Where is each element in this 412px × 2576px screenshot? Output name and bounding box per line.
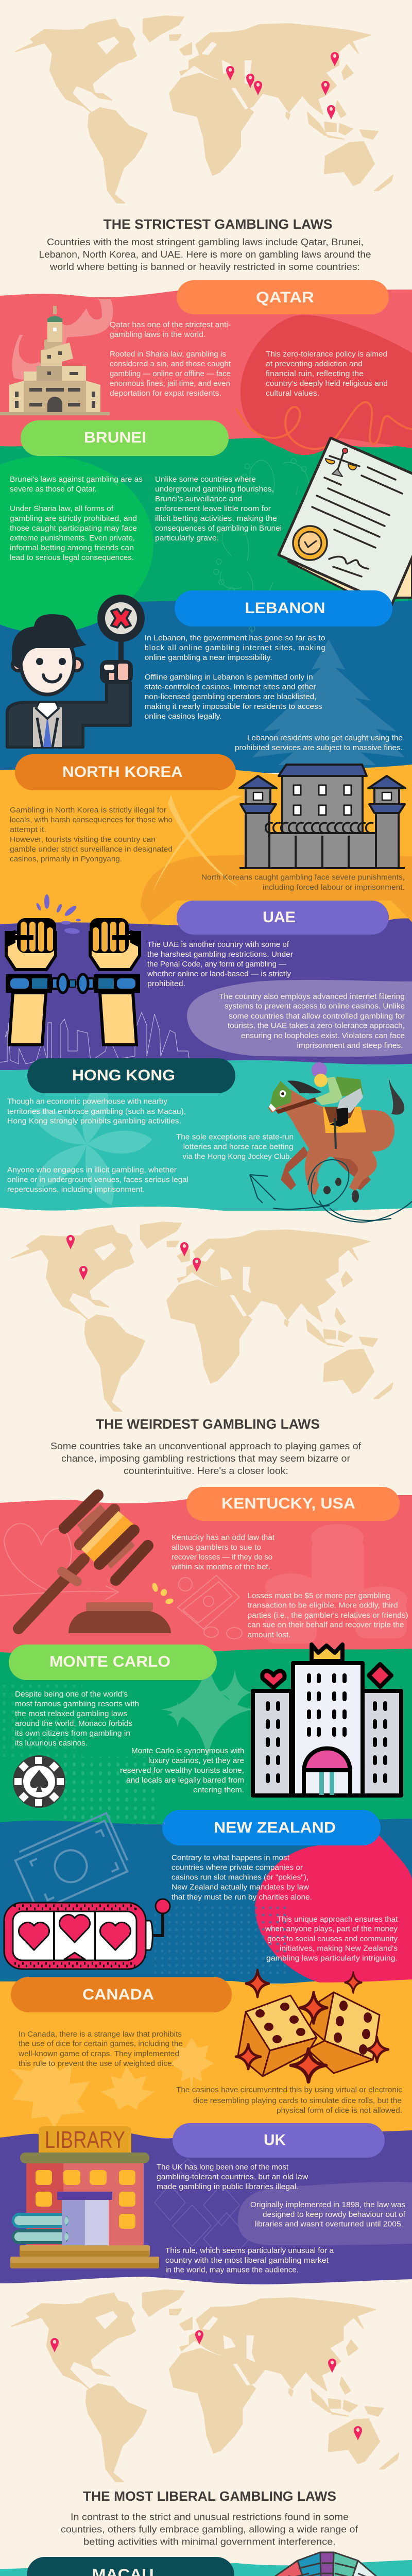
text: UAE right: ensuring no loopholes exist. Violators can face — [241, 1032, 405, 1040]
text: Brunei right — [155, 476, 282, 543]
text: Qatar right: This zero-tolerance policy is aimed — [266, 350, 387, 359]
text: Qatar right — [266, 350, 388, 398]
intro text: weirdest: counterintuitive. Here's a closer look: — [124, 1466, 288, 1476]
blob and faint X backdrop — [141, 794, 412, 922]
text: Qatar left: considered a sin, and those caught — [110, 360, 231, 368]
text: Hong Kong penalties: Anyone who engages in illicit gambling, whether — [7, 1166, 177, 1175]
text: Lebanon main: making it nearly impossible for residents to access — [145, 703, 322, 711]
text: Qatar right: at preventing addiction and — [266, 360, 363, 368]
text: UK middle: libraries and wasn't overturned until 2005. — [254, 2221, 403, 2229]
text: Qatar left: Qatar has one of the strictest anti- — [110, 321, 231, 329]
text: Lebanon main: state-controlled casinos. Internet sites and other — [145, 683, 316, 691]
pill: Kentucky: KENTUCKY, USA — [221, 1495, 355, 1512]
text: Lebanon main — [145, 634, 325, 721]
text: Canada right: The casinos have circumvented this by using virtual or electronic — [176, 2086, 402, 2094]
text: Kentucky bottom: Losses must be $5 or more per gambling — [248, 1592, 390, 1600]
text: UAE right: systems to prevent access to online casinos. Unlike — [225, 1003, 405, 1011]
intro text: strictest — [39, 237, 371, 272]
icon: casino hotel — [253, 1645, 401, 1795]
cedar tree backdrop — [252, 639, 405, 765]
intro text: strictest: Lebanon, North Korea, and UAE. Here is more on gambling laws around the — [39, 249, 371, 260]
icon: library building — [10, 2126, 159, 2268]
pill: Hong Kong: HONG KONG — [72, 1067, 175, 1084]
text: Hong Kong top: Though an economic powerhouse with nearby — [7, 1097, 168, 1106]
text: Qatar left — [110, 321, 231, 398]
bauhinia flower backdrop — [25, 1080, 154, 1209]
text: Lebanon main: online gambling a near impossibility. — [145, 654, 272, 662]
text: Canada right: physical form of dice is not allowed. — [277, 2107, 402, 2115]
text: Qatar left: deportation for expat residents. — [110, 389, 221, 398]
panel: Hong Kong — [7, 1058, 412, 1222]
text: New Zealand bottom — [265, 1916, 398, 1963]
text: UAE right: some countries that allow controlled gambling for — [229, 1012, 405, 1021]
text: Monte Carlo right: entering them. — [193, 1786, 244, 1794]
text: Qatar left: enormous fines, jail time, and even — [110, 380, 230, 388]
pill: UK — [173, 2123, 385, 2158]
text: Brunei left: informal betting among friends can — [10, 544, 134, 552]
panel: UK — [10, 2123, 412, 2275]
text: Lebanon main: online casinos legally. — [145, 713, 222, 721]
faint diamond pattern — [154, 2159, 250, 2264]
text: UAE right: The country also employs advanced internet filtering — [219, 993, 405, 1001]
icon: dice — [236, 1970, 388, 2082]
text: Canada right — [176, 2086, 402, 2115]
text: Hong Kong exceptions: The sole exceptions are state-run — [176, 1133, 294, 1142]
heading: weirdest gambling laws: THE WEIRDEST GAMBLING LAWS — [96, 1416, 320, 1432]
text: Monte Carlo left: Despite being one of the world's — [15, 1690, 128, 1699]
text: North Korea right: including forced labour or imprisonment. — [263, 884, 405, 892]
text: Brunei left: Under Sharia law, all forms of — [10, 505, 114, 513]
text: North Korea left — [10, 806, 173, 863]
text: North Korea left: Gambling in North Korea is strictly illegal for — [10, 806, 166, 815]
panel: Qatar — [0, 280, 412, 455]
pill: Hong Kong — [27, 1058, 235, 1093]
text: New Zealand top: New Zealand actually mandates by law — [171, 1884, 310, 1892]
text: Kentucky top: Kentucky has an odd law that — [171, 1534, 274, 1542]
pill: New Zealand — [162, 1810, 381, 1845]
text: Brunei right: Brunei's surveillance and — [155, 495, 242, 503]
world map: weirdest laws — [11, 1222, 393, 1411]
text: Qatar right: financial ruin, reflecting the — [266, 370, 364, 378]
text: UAE right — [219, 993, 405, 1050]
text: Brunei left: those caught participating may face — [10, 524, 137, 533]
text: Kentucky top: within six months of the bet. — [171, 1563, 270, 1571]
pill: UAE — [177, 901, 389, 935]
text: Monte Carlo left: most famous gambling resorts with — [15, 1700, 139, 1708]
blob: dark red — [241, 315, 412, 455]
text: North Korea left: However, tourists visiting the country can — [10, 836, 156, 844]
intro text: liberal: countries, others fully embrace gambling, allowing a wide range of — [61, 2524, 358, 2535]
intro text: weirdest: chance, imposing gambling restrictions that may seem bizarre or — [61, 1453, 350, 1464]
icon: man holding prohibition sign — [7, 595, 145, 747]
text: Monte Carlo left: around the world, Monaco forbids — [15, 1720, 132, 1728]
text: Monte Carlo right: luxury casinos, yet they are — [148, 1757, 244, 1765]
text: UAE right: tourists, the UAE takes a zero-tolerance approach, — [228, 1022, 405, 1030]
text: Lebanon main: block all online gambling internet sites, making — [145, 644, 325, 652]
pill: Brunei: BRUNEI — [84, 429, 146, 446]
text: Brunei left: gambling are strictly prohibited, and — [10, 515, 137, 523]
panel: Monte Carlo — [0, 1645, 401, 1824]
text: New Zealand top — [171, 1854, 312, 1902]
text: Brunei left: Brunei's laws against gambling are as — [10, 476, 143, 484]
text: New Zealand bottom: goes to social causes and community — [267, 1935, 398, 1943]
text: Lebanon fines — [235, 734, 403, 752]
text: UK bottom: This rule, which seems particularly unusual for a — [165, 2247, 334, 2255]
text: Hong Kong exceptions: via the Hong Kong Jockey Club. — [183, 1153, 292, 1161]
panel: Lebanon — [7, 590, 405, 765]
text: Hong Kong exceptions — [176, 1133, 294, 1161]
text: North Korea right: North Koreans caught gambling face severe punishments, — [201, 874, 405, 882]
intro text: weirdest — [50, 1441, 362, 1476]
pill: North Korea — [15, 754, 236, 790]
intro text: liberal: In contrast to the strict and unusual restrictions found in some — [71, 2512, 349, 2522]
faint heart and money doodles — [0, 1523, 242, 1639]
text: Monte Carlo left: its luxurious casinos. — [15, 1739, 88, 1748]
text: Monte Carlo left: its own citizens from gambling in — [15, 1730, 130, 1738]
text: New Zealand top: Contrary to what happens in most — [171, 1854, 289, 1862]
text: UK bottom: in the world, may amuse the audience. — [165, 2266, 299, 2275]
text: Brunei right: Unlike some countries where — [155, 476, 256, 484]
text: Canada left: this rule to prevent the use of weighted dice. — [19, 2060, 174, 2068]
text: UK top: made gambling in public libraries illegal. — [157, 2183, 299, 2191]
halftone and sparkle backdrop — [0, 1658, 254, 1824]
icon: handcuffed fists — [5, 894, 141, 1045]
text: UK bottom — [165, 2247, 334, 2275]
text: Brunei right: particularly grave. — [155, 534, 219, 543]
text: Lebanon main: In Lebanon, the government has gone so far as to — [145, 634, 325, 642]
text: Kentucky top: recover losses — if they do so — [171, 1553, 272, 1562]
pill: Qatar — [177, 280, 389, 314]
panel: Kentucky — [0, 1487, 408, 1643]
text: UK middle: designed to keep rowdy behaviour out of — [263, 2211, 406, 2219]
pill: UAE: UAE — [263, 909, 296, 926]
text: North Korea left: casinos, primarily in Pyongyang. — [10, 855, 122, 863]
icon: prison — [239, 765, 405, 868]
text: UK top — [157, 2163, 308, 2191]
panel: Canada — [10, 1970, 402, 2128]
skyline outline — [0, 1012, 195, 1064]
pill: New Zealand: NEW ZEALAND — [214, 1819, 336, 1836]
text: Qatar left: Rooted in Sharia law, gambling is — [110, 350, 226, 359]
calligraphy backdrop — [12, 299, 113, 380]
text: Qatar right: cultural values. — [266, 389, 319, 398]
text: New Zealand top: that they must be run by charities alone. — [171, 1893, 312, 1902]
icon: gavel — [19, 1495, 174, 1633]
text: UAE left: the harshest gambling restrictions. Under — [147, 951, 293, 959]
scribble: orange — [236, 402, 412, 449]
panel: North Korea — [10, 754, 412, 922]
banknotes backdrop — [13, 1813, 131, 1911]
panel: Brunei — [0, 420, 412, 634]
text: Lebanon main: non-licensed gambling operators are blacklisted, — [145, 693, 317, 701]
icon: legal document — [279, 438, 412, 605]
heading: most liberal gambling laws: THE MOST LIBERAL GAMBLING LAWS — [83, 2488, 336, 2504]
heading: strictest gambling laws: THE STRICTEST GAMBLING LAWS — [103, 216, 333, 232]
text: Monte Carlo right: Monte Carlo is synonymous with — [131, 1747, 244, 1755]
text: Brunei right: enforcement leave little room for — [155, 505, 271, 513]
text: Hong Kong top: territories that embrace gambling (such as Macau), — [7, 1108, 186, 1116]
icon: library building: LIBRARY — [45, 2126, 125, 2153]
text: Kentucky top: allows gamblers to sue to — [171, 1544, 261, 1552]
text: UAE left: The UAE is another country with some of — [147, 941, 289, 949]
text: Canada right: dice resembling playing cards to simulate dice rolls, but the — [193, 2097, 402, 2105]
pill: Lebanon: LEBANON — [245, 600, 325, 617]
pill: Kentucky — [186, 1487, 400, 1521]
text: Kentucky bottom: transaction to be eligible. More oddly, third — [248, 1601, 398, 1609]
intro text: weirdest: Some countries take an unconventional approach to playing games of — [50, 1441, 362, 1451]
text: Brunei right: underground gambling flourishes, — [155, 485, 274, 494]
pill: Brunei — [21, 420, 229, 456]
text: UK middle — [250, 2201, 406, 2229]
text: Monte Carlo right: reserved for wealthy tourists alone, — [120, 1767, 244, 1775]
text: Canada left: the use of dice for certain games, including the — [19, 2040, 183, 2048]
text: Hong Kong top — [7, 1097, 186, 1126]
pill: Canada — [11, 1977, 232, 2012]
text: Brunei left: extreme punishments. Even private, — [10, 534, 135, 543]
text: UAE left — [147, 941, 293, 988]
text: North Korea left: attempt it. — [10, 826, 46, 834]
text: UK top: The UK has long been one of the most — [157, 2163, 288, 2172]
text: Monte Carlo right — [120, 1747, 244, 1794]
blob: light green — [0, 456, 153, 633]
text: Qatar left: gambling — online or offline — face — [110, 370, 231, 378]
text: Kentucky bottom: can sue on their behalf and recover triple the — [248, 1621, 404, 1630]
pill: Macau — [27, 2557, 234, 2576]
text: Canada left: well-known game of craps. They implemented — [18, 2050, 179, 2058]
text: Brunei right: consequences of gambling in Brunei — [155, 524, 282, 533]
panel: Macau — [15, 2552, 391, 2576]
pill: UK: UK — [264, 2132, 286, 2149]
text: Brunei left — [10, 476, 143, 562]
text: North Korea left: gamble under strict surveillance in designated — [10, 845, 173, 854]
text: Hong Kong penalties: online or in underground venues, faces serious legal — [7, 1176, 188, 1184]
blob: pink — [255, 1835, 412, 1982]
icon: tower mosque — [0, 306, 110, 415]
pill: Monte Carlo: MONTE CARLO — [49, 1653, 170, 1670]
text: Kentucky bottom: amount lost. — [248, 1631, 291, 1639]
faint foliage pattern — [214, 459, 309, 634]
text: Kentucky top — [171, 1534, 274, 1571]
world map: liberal laws — [11, 2290, 399, 2482]
text: North Korea right — [201, 874, 405, 892]
intro text: liberal — [61, 2512, 358, 2547]
text: Brunei left: severe as those of Qatar. — [10, 485, 97, 494]
pill: Lebanon — [175, 590, 392, 626]
text: New Zealand bottom: when anyone plays, part of the money — [265, 1925, 398, 1934]
intro text: strictest: world where betting is banned or heavily restricted in some countries: — [49, 262, 360, 272]
pill: Qatar: QATAR — [256, 289, 314, 306]
text: Lebanon fines: prohibited services are subject to massive fines. — [235, 744, 403, 752]
text: UK bottom: country with the most liberal gambling market — [165, 2257, 329, 2265]
text: UK middle: Originally implemented in 1898, the law was — [250, 2201, 405, 2209]
panel: New Zealand — [4, 1810, 412, 1982]
text: UK top: gambling-tolerant countries, but an old law — [157, 2173, 308, 2181]
maple leaves backdrop — [10, 2038, 214, 2128]
text: Qatar right: country's deeply held religious and — [266, 380, 388, 388]
pill: Canada: CANADA — [82, 1986, 154, 2003]
icon: jockey on horse — [250, 1062, 412, 1222]
intro text: strictest: Countries with the most stringent gambling laws include Qatar, Brunei, — [47, 237, 364, 247]
text: New Zealand bottom: gambling laws particularly intriguing. — [266, 1955, 398, 1963]
text: UAE left: prohibited. — [147, 980, 185, 988]
text: Monte Carlo left — [15, 1690, 139, 1748]
text: Monte Carlo right: and locals are legally barred from — [126, 1776, 244, 1785]
text: New Zealand top: casinos run slot machines (or "pokies"), — [171, 1874, 308, 1882]
text: Kentucky bottom: parties (i.e., the gambler's relatives or friends) — [248, 1612, 408, 1620]
text: Hong Kong top: Hong Kong strongly prohibits gambling activities. — [7, 1117, 181, 1126]
text: New Zealand top: countries where private companies or — [171, 1864, 303, 1872]
pill: Monte Carlo — [9, 1645, 217, 1680]
text: Lebanon fines: Lebanon residents who get caught using the — [247, 734, 403, 742]
text: Brunei left: lead to serious legal consequences. — [10, 554, 134, 562]
panel: UAE — [0, 894, 412, 1064]
text: Canada left — [18, 2030, 183, 2068]
text: New Zealand bottom: This unique approach ensures that — [277, 1916, 398, 1924]
text: Monte Carlo left: the most relaxed gambling laws — [15, 1710, 127, 1718]
icon: slot machine — [4, 1899, 170, 1969]
text: UAE left: the Penal Code, any form of gambling — — [147, 960, 287, 969]
text: Kentucky bottom — [248, 1592, 408, 1639]
text: Hong Kong exceptions: lotteries and horse race betting — [183, 1143, 294, 1151]
blob: soft purple — [238, 2182, 412, 2245]
text: Qatar left: gambling laws in the world. — [110, 331, 205, 339]
text: Hong Kong penalties: repercussions, including imprisonment. — [7, 1186, 145, 1194]
text: North Korea left: locals, with harsh consequences for those who — [10, 816, 173, 824]
text: UAE right: imprisonment and steep fines. — [297, 1042, 403, 1050]
halftone backdrop — [154, 1905, 288, 1974]
text: Brunei right: illicit betting activities, making the — [155, 515, 277, 523]
intro text: liberal: betting activities with minimal government interference. — [83, 2537, 336, 2547]
blob: light purple — [187, 980, 412, 1057]
text: Lebanon main: Offline gambling in Lebanon is permitted only in — [145, 673, 313, 682]
text: UAE left: whether online or land-based — is strictly — [147, 970, 291, 978]
text: Hong Kong penalties — [7, 1166, 188, 1194]
icon: casino building — [263, 2552, 391, 2576]
poker chips backdrop — [265, 1524, 407, 1643]
icon: poker chip — [13, 1755, 65, 1808]
text: New Zealand bottom: initiatives, making New Zealand's — [280, 1945, 398, 1953]
world map: strictest countries — [15, 16, 393, 203]
text: Canada left: In Canada, there is a strange law that prohibits — [19, 2030, 182, 2039]
pill: North Korea: NORTH KOREA — [62, 764, 183, 781]
